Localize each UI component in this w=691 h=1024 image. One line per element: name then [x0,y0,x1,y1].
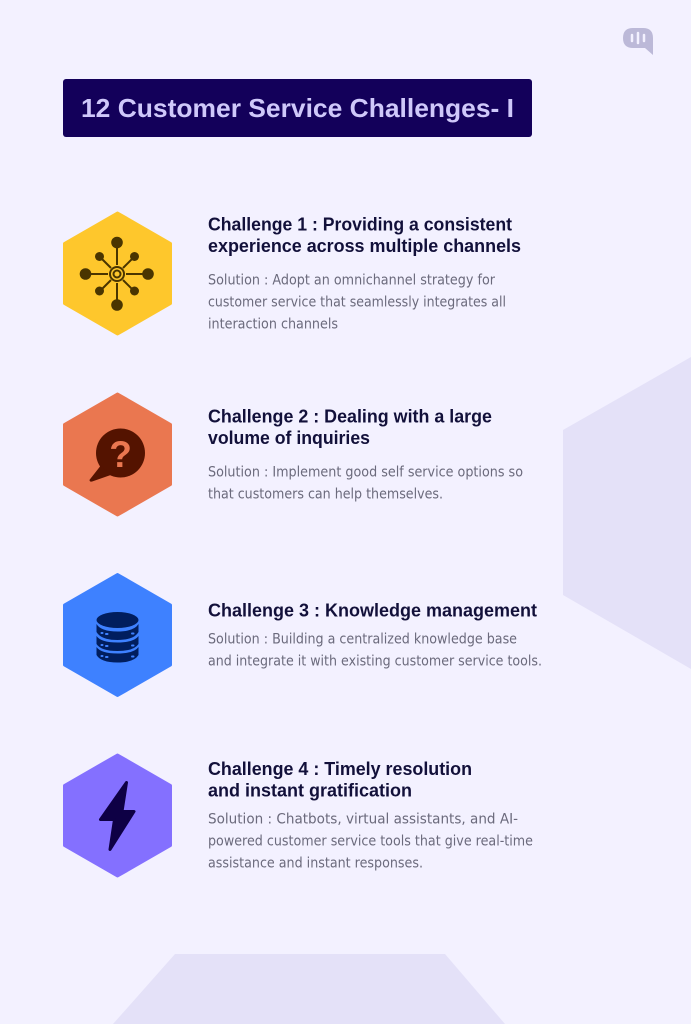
text: solution 4: powered customer service tools that give real-time [208,834,533,850]
heading: challenge 4: and instant gratification [208,780,412,800]
icon: logo speech bubble [623,28,653,55]
text: solution 1: interaction channels [208,316,338,332]
panel: challenge 3 [64,574,542,696]
text: solution 4: assistance and instant responses. [208,856,423,872]
heading: challenge 2: volume of inquiries [208,428,370,448]
decorative hexagon right [563,357,691,669]
panel: challenge 4 [64,755,533,876]
icon: network hub hexagon [64,213,170,334]
text: solution 2: that customers can help themselves. [208,486,443,502]
text: solution 1: customer service that seamlessly integrates all [208,294,506,310]
panel: challenge 1 [64,213,521,334]
text: solution 3: Solution : Building a centralized knowledge base [208,632,517,648]
icon: question bubble hexagon: ? [109,434,132,475]
icon: question bubble hexagon [64,394,170,515]
icon: lightning bolt hexagon [64,755,170,876]
heading: challenge 1: Challenge 1 : Providing a consistent [208,214,512,234]
text: solution 3: and integrate it with existing customer service tools. [208,654,542,670]
title [63,79,532,137]
title: 12 Customer Service Challenges- I [81,93,514,123]
heading: challenge 3: Challenge 3 : Knowledge management [208,600,537,620]
text: solution 4: Solution : Chatbots, virtual assistants, and AI- [208,812,518,828]
decorative hexagon bottom [113,954,505,1024]
heading: challenge 2: Challenge 2 : Dealing with a large [208,406,492,426]
text: solution 2: Solution : Implement good self service options so [208,464,523,480]
heading: challenge 1: experience across multiple channels [208,236,521,256]
text: solution 1: Solution : Adopt an omnichannel strategy for [208,272,495,288]
heading: challenge 4: Challenge 4 : Timely resolution [208,759,472,779]
panel: challenge 2 [64,394,523,515]
icon: database hexagon [64,574,170,696]
